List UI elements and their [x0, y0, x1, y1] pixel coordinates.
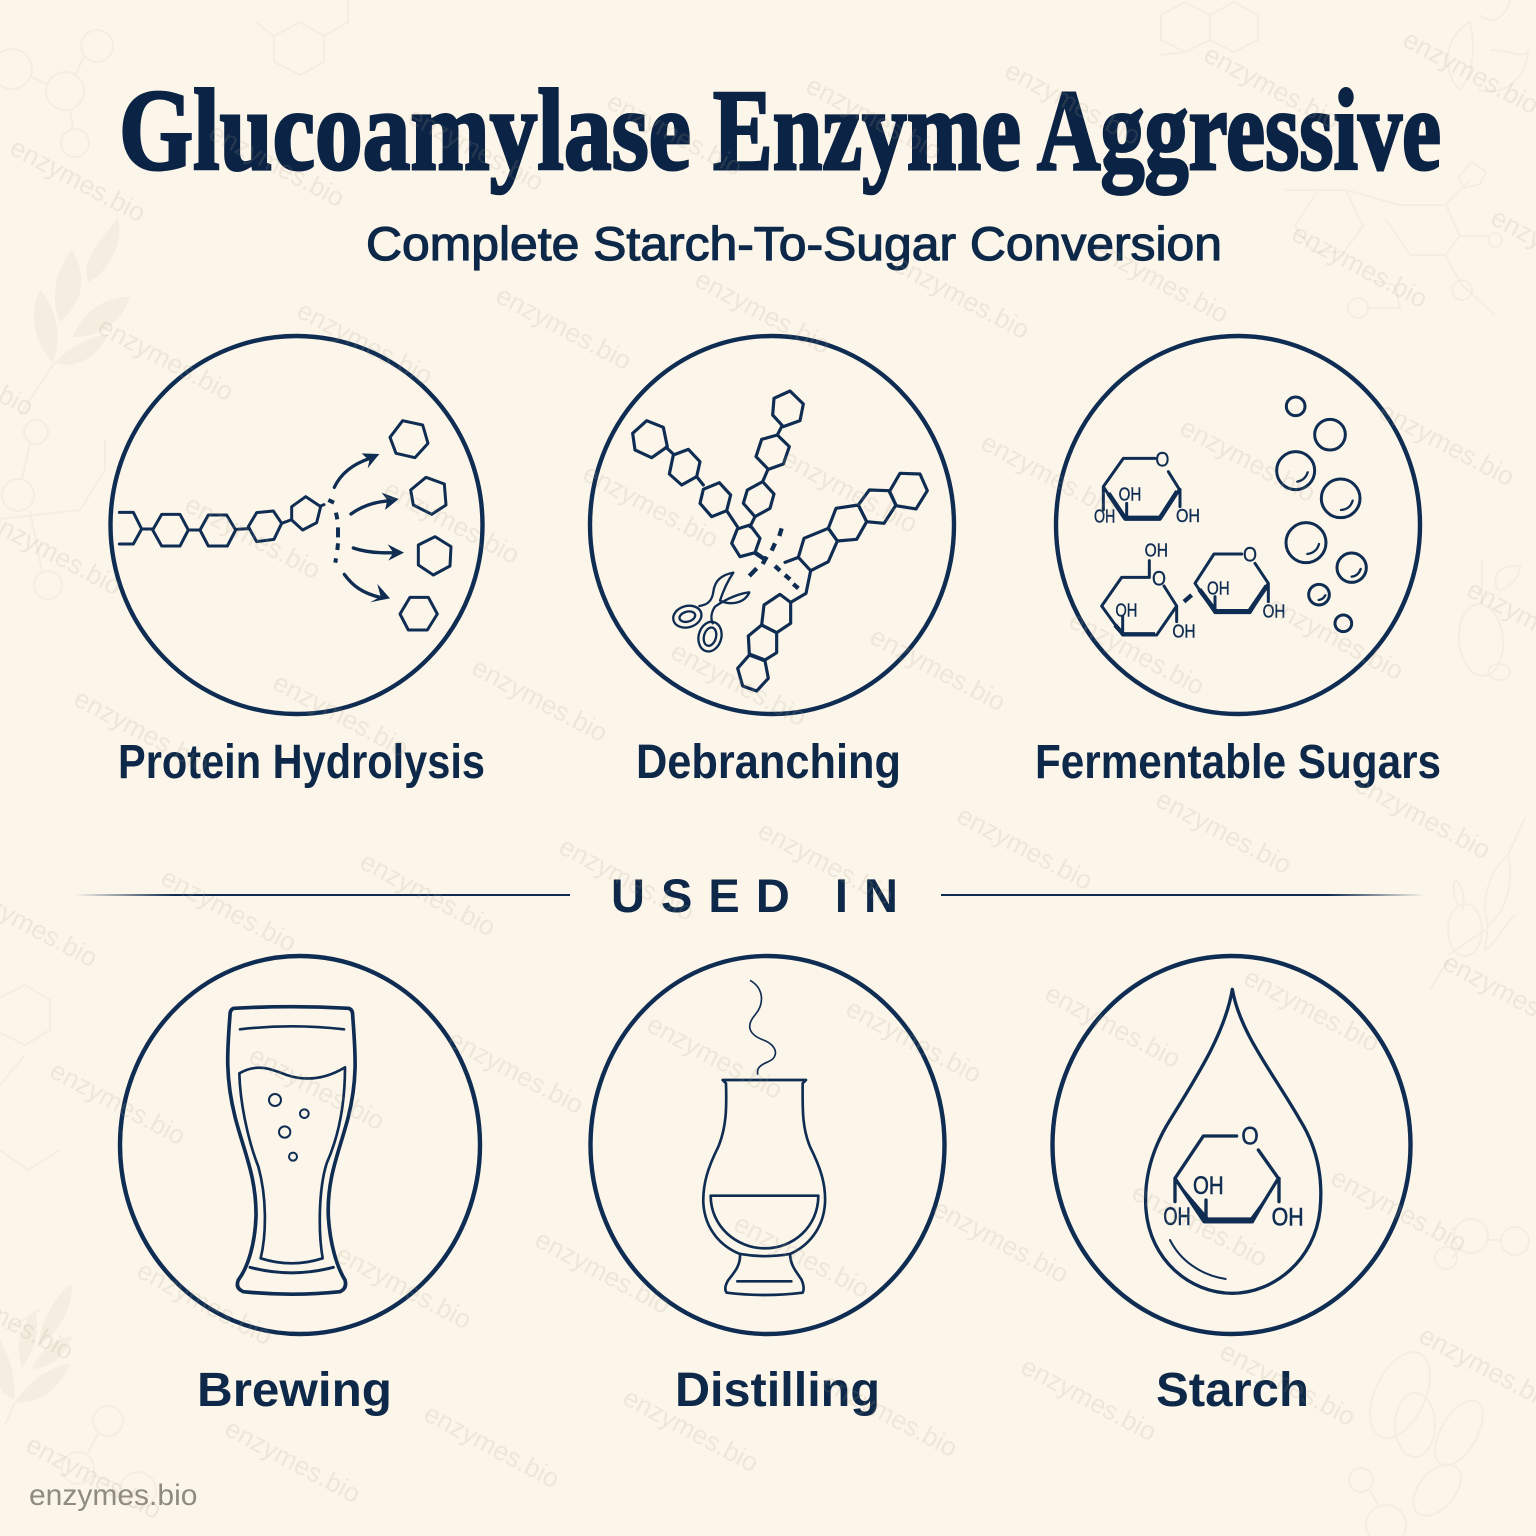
watermark pattern: enzymes.bio: [419, 1398, 565, 1494]
icon: sugar molecules and bubbles: OH: [1119, 483, 1141, 504]
icon: sugar molecules and bubbles: O: [1152, 567, 1166, 591]
watermark pattern: enzymes.bio: [21, 1429, 167, 1525]
watermark pattern: enzymes.bio: [45, 1055, 191, 1151]
watermark pattern: enzymes.bio: [355, 846, 501, 942]
circle outline: [590, 956, 944, 1334]
watermark pattern: enzymes.bio: [379, 474, 525, 570]
watermark pattern: enzymes.bio: [1088, 233, 1234, 329]
panel: debranching: [590, 336, 954, 789]
watermark pattern: enzymes.bio: [180, 489, 326, 585]
icon: droplet with sugar ring: OH: [1193, 1173, 1224, 1200]
icon: sugar molecules and bubbles: OH: [1145, 540, 1168, 561]
watermark pattern: enzymes.bio: [1000, 55, 1146, 151]
label: Starch: [1156, 1364, 1309, 1417]
watermark pattern: enzymes.bio: [1175, 412, 1321, 508]
icon: droplet with sugar ring: O: [1241, 1124, 1259, 1151]
watermark pattern: enzymes.bio: [244, 1040, 390, 1136]
icon: scissors: [671, 573, 749, 654]
icon: droplet with sugar ring: OH: [1272, 1204, 1304, 1231]
watermark pattern: enzymes.bio: [976, 427, 1122, 523]
watermark pattern: enzymes.bio: [491, 280, 637, 376]
watermark pattern: enzymes.bio: [403, 101, 549, 197]
watermark pattern: enzymes.bio: [530, 1224, 676, 1320]
icon: sugar molecules and bubbles: OH: [1094, 506, 1115, 527]
watermark pattern: enzymes.bio: [1374, 396, 1520, 492]
icon: sugar molecules and bubbles: [1094, 397, 1366, 642]
watermark pattern: enzymes.bio: [1239, 962, 1385, 1058]
section divider: used in: USED IN: [611, 869, 898, 922]
watermark pattern: enzymes.bio: [1263, 590, 1409, 686]
watermark pattern: enzymes.bio: [618, 1382, 764, 1478]
watermark pattern: enzymes.bio: [642, 1009, 788, 1105]
circle outline: [110, 336, 482, 714]
title: Enzyme: [713, 67, 1021, 195]
watermark pattern: enzymes.bio: [841, 993, 987, 1089]
panel: distilling: [590, 956, 944, 1417]
watermark pattern: enzymes.bio: [1040, 978, 1186, 1074]
title: Glucoamylase: [119, 67, 691, 195]
panel: fermentable sugars: [1035, 336, 1441, 789]
icon: sugar molecules and bubbles: O: [1243, 543, 1257, 567]
watermark pattern: enzymes.bio: [1016, 1351, 1162, 1447]
watermark pattern: enzymes.bio: [268, 667, 414, 763]
watermark pattern: enzymes.bio: [729, 1208, 875, 1304]
watermark pattern: enzymes.bio: [801, 70, 947, 166]
watermark pattern: enzymes.bio: [1151, 784, 1297, 880]
watermark pattern: enzymes.bio: [331, 1239, 477, 1335]
watermark pattern: enzymes.bio: [554, 831, 700, 927]
watermark pattern: enzymes.bio: [928, 1193, 1074, 1289]
watermark pattern: enzymes.bio: [777, 443, 923, 539]
watermark pattern: enzymes.bio: [1350, 769, 1496, 865]
watermark pattern: enzymes.bio: [753, 815, 899, 911]
icon: sugar molecules and bubbles: OH: [1115, 600, 1137, 621]
icon: sugar molecules and bubbles: O: [1155, 448, 1169, 472]
watermark pattern: enzymes.bio: [578, 458, 724, 554]
icon: sugar molecules and bubbles: OH: [1207, 578, 1230, 599]
panel: protein hydrolysis: [110, 336, 485, 789]
watermark pattern: enzymes.bio: [292, 295, 438, 391]
watermark pattern: enzymes.bio: [817, 1367, 963, 1463]
label: Fermentable Sugars: [1035, 736, 1441, 789]
watermark pattern: enzymes.bio: [5, 132, 151, 228]
watermark pattern: enzymes.bio: [220, 1413, 366, 1509]
watermark pattern: enzymes.bio: [889, 249, 1035, 345]
icon: sugar molecules and bubbles: OH: [1263, 600, 1285, 621]
circle outline: [1056, 336, 1420, 714]
title: [119, 67, 1441, 195]
watermark pattern: enzymes.bio: [1199, 39, 1345, 135]
label: Distilling: [675, 1364, 880, 1417]
watermark pattern: enzymes.bio: [1326, 1162, 1472, 1258]
watermark pattern: enzymes.bio: [93, 311, 239, 407]
panel: brewing: [120, 956, 480, 1417]
panel: starch: [1052, 956, 1410, 1417]
label: Brewing: [197, 1364, 392, 1417]
watermark pattern: enzymes.bio: [1064, 605, 1210, 701]
watermark pattern: enzymes.bio: [1215, 1336, 1361, 1432]
watermark pattern: enzymes.bio: [467, 652, 613, 748]
circle outline: [1052, 956, 1410, 1334]
icon: droplet with sugar ring: [1146, 989, 1321, 1293]
watermark pattern: enzymes.bio: [602, 86, 748, 182]
icon: branched chains and scissors: [633, 391, 927, 691]
circle outline: [590, 336, 954, 714]
watermark pattern: enzymes.bio: [952, 800, 1098, 896]
watermark pattern: enzymes.bio: [1127, 1177, 1273, 1273]
icon: sugar molecules and bubbles: OH: [1172, 621, 1196, 642]
watermark pattern: enzymes.bio: [204, 117, 350, 213]
icon: sugar molecules and bubbles: OH: [1176, 505, 1200, 526]
icon: starch chain breaking into units: [119, 421, 451, 630]
icon: droplet with sugar ring: OH: [1163, 1204, 1191, 1231]
watermark pattern: enzymes.bio: [690, 264, 836, 360]
footer brand: enzymes.bio: [29, 1479, 197, 1512]
subtitle: Complete Starch-To-Sugar Conversion: [366, 217, 1222, 270]
icon: beer glass: [228, 1007, 355, 1294]
watermark pattern: enzymes.bio: [865, 621, 1011, 717]
watermark pattern: enzymes.bio: [69, 683, 215, 779]
label: Debranching: [636, 736, 901, 789]
watermark pattern: enzymes.bio: [132, 1255, 278, 1351]
watermark pattern: enzymes.bio: [666, 636, 812, 732]
watermark pattern: enzymes.bio: [443, 1024, 589, 1120]
watermark pattern: enzymes.bio: [156, 862, 302, 958]
circle outline: [120, 956, 480, 1334]
watermark pattern: enzymes.bio: [1287, 218, 1433, 314]
label: Protein Hydrolysis: [118, 736, 485, 789]
icon: tasting glass with vapour: [703, 981, 825, 1295]
